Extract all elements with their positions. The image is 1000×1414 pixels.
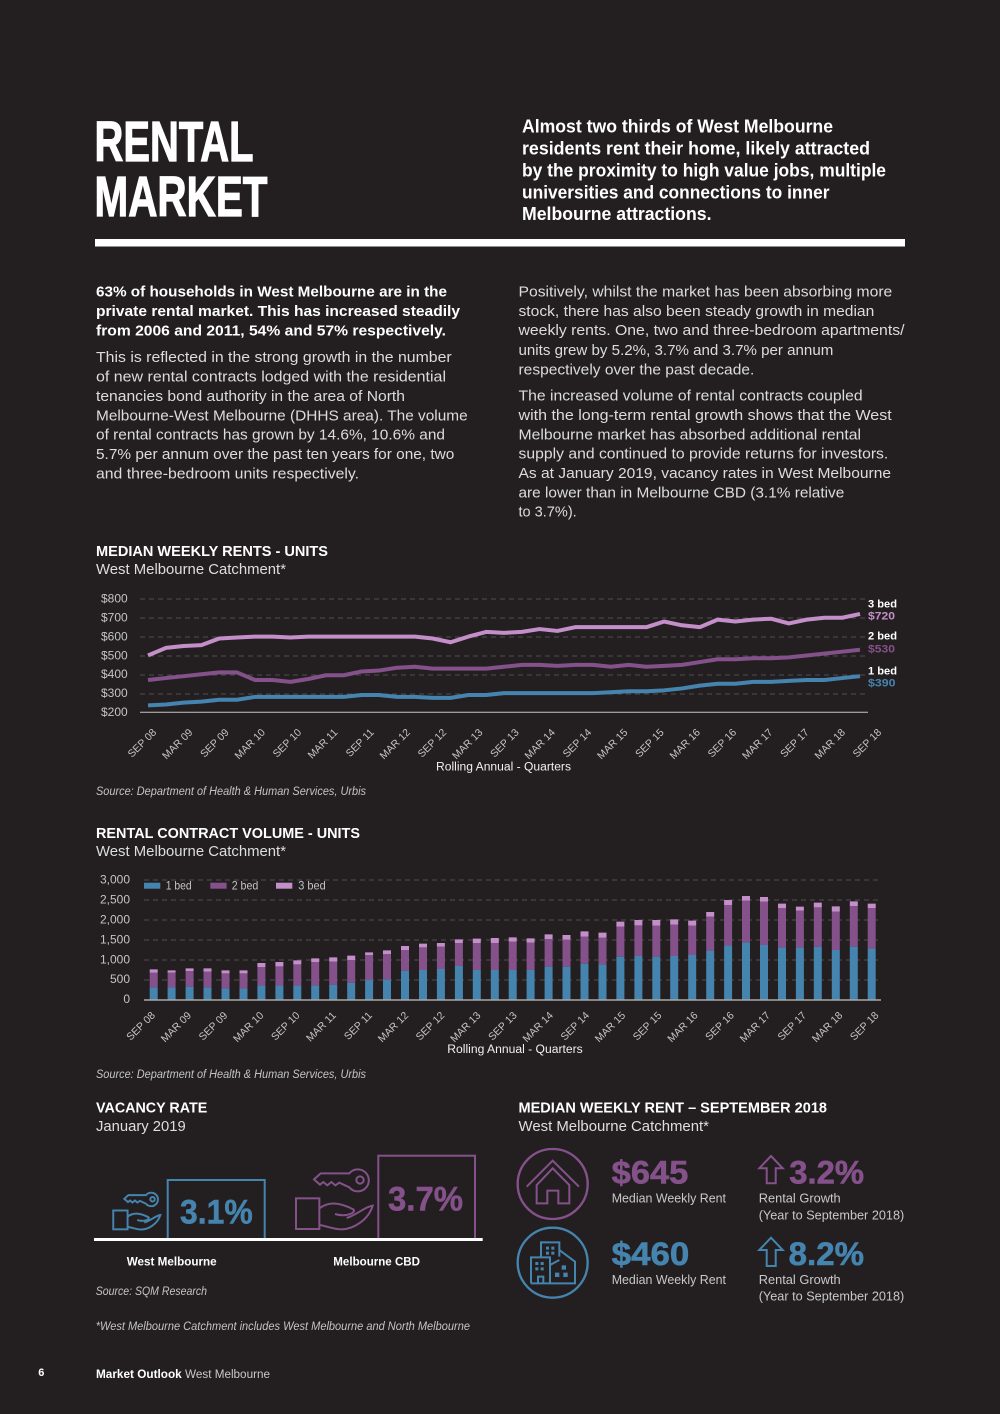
left column: body paragraph: tenancies bond authority in the area of North: [96, 388, 405, 405]
heading: median weekly rents: [96, 544, 328, 578]
right column: body paragraphs: are lower than in Melbourne CBD (3.1% relative: [518, 484, 844, 501]
stat: apartment rent $645: [612, 1154, 726, 1206]
heading: rental contract volume: RENTAL CONTRACT VOLUME - UNITS: [96, 826, 360, 842]
line chart: median weekly rents: SEP 18: [851, 727, 884, 760]
bar chart: rental contract volume: 1 bed: [166, 878, 192, 892]
line chart: median weekly rents: MAR 18: [813, 727, 848, 762]
stat: unit rent $460: $460: [612, 1236, 689, 1272]
line chart: median weekly rents: SEP 14: [561, 727, 594, 760]
source: contract chart: Source: Department of Health & Human Services, Urbis: [96, 1069, 366, 1081]
heading: vacancy rate: VACANCY RATE: [96, 1101, 208, 1117]
box: West Melbourne 3.1%: 3.1%: [180, 1193, 253, 1231]
right column: body paragraphs: The increased volume of rental contracts coupled: [518, 388, 863, 405]
footer: Market Outlook: [96, 1369, 182, 1381]
right column: body paragraphs: respectively over the past decade.: [518, 361, 754, 378]
bar chart: rental contract volume: SEP 14: [558, 1010, 592, 1043]
bar chart: rental contract volume: SEP 17: [775, 1010, 809, 1043]
stat: growth 3.2%: (Year to September 2018): [759, 1207, 904, 1222]
left column: body paragraph: of new rental contracts lodged with the residential: [96, 368, 446, 386]
bar chart: rental contract volume: 0: [123, 992, 130, 1006]
stat: apartment rent $645: Median Weekly Rent: [612, 1191, 726, 1206]
left column: lead paragraph: from 2006 and 2011, 54% and 57% respectively.: [96, 322, 446, 340]
title: RENTAL: [94, 110, 254, 174]
bar chart: rental contract volume: SEP 10: [269, 1010, 303, 1043]
heading: median weekly rent september 2018: West Melbourne Catchment*: [518, 1119, 709, 1135]
line chart: median weekly rents: $200: [101, 705, 128, 719]
line chart: median weekly rents: SEP 15: [633, 727, 667, 760]
footer: 6: [38, 1367, 44, 1379]
heading: median weekly rent september 2018: [518, 1101, 827, 1135]
right column: body paragraphs: As at January 2019, vacancy rates in West Melbourne: [518, 465, 891, 482]
line chart: median weekly rents: MAR 12: [378, 727, 413, 762]
heading: median weekly rents: West Melbourne Catchment*: [96, 562, 286, 578]
box: West Melbourne 3.1%: [168, 1180, 265, 1240]
line chart: median weekly rents: $390: [868, 678, 896, 690]
line chart: median weekly rents: MAR 09: [160, 727, 195, 762]
box: Melbourne CBD 3.7%: [378, 1156, 475, 1240]
left column: body paragraph: and three-bedroom units respectively.: [96, 465, 359, 482]
line chart: median weekly rents: $600: [101, 630, 128, 644]
icon: blue hand and key: [113, 1193, 160, 1230]
bar chart: rental contract volume: SEP 18: [848, 1010, 882, 1043]
line chart: median weekly rents: MAR 17: [740, 727, 775, 762]
line chart: median weekly rents: SEP 16: [706, 727, 739, 760]
heading: rental contract volume: [96, 826, 360, 860]
stat: growth 3.2%: Rental Growth: [759, 1191, 841, 1206]
bar chart: rental contract volume: 500: [110, 972, 130, 986]
right column: body paragraphs: Positively, whilst the market has been absorbing more: [518, 284, 892, 300]
footnote: *West Melbourne Catchment includes West Melbourne and North Melbourne: [96, 1321, 470, 1333]
heading: median weekly rent september 2018: MEDIAN WEEKLY RENT – SEPTEMBER 2018: [518, 1101, 827, 1117]
left column: body paragraph: of rental contracts has grown by 14.6%, 10.6% and: [96, 427, 445, 444]
line chart: median weekly rents: MAR 13: [450, 727, 485, 762]
line chart: median weekly rents: 1 bed: [868, 665, 897, 677]
bar chart: rental contract volume: SEP 15: [631, 1010, 664, 1043]
bar chart: rental contract volume: SEP 13: [486, 1010, 520, 1043]
left column: lead paragraph: [96, 284, 461, 340]
right column: body paragraphs: supply and continued to provide returns for investors.: [518, 446, 888, 463]
line chart: median weekly rents: $800: [101, 592, 128, 606]
bar chart: rental contract volume: MAR 18: [810, 1010, 845, 1045]
bar chart: rental contract volume: MAR 15: [593, 1010, 628, 1045]
line chart: median weekly rents: 2 bed: [868, 630, 897, 642]
stat: growth 3.2%: [759, 1154, 904, 1222]
bar chart: rental contract volume: MAR 16: [665, 1010, 701, 1045]
line chart: median weekly rents: MAR 16: [668, 727, 703, 762]
right column: body paragraphs: [517, 284, 905, 521]
bar chart: rental contract volume: MAR 13: [448, 1010, 484, 1045]
left column: lead paragraph: 63% of households in West Melbourne are in the: [96, 284, 447, 300]
line chart: median weekly rents: SEP 13: [488, 727, 522, 760]
bar chart: rental contract volume: MAR 12: [376, 1010, 411, 1045]
left column: lead paragraph: private rental market. This has increased steadily: [96, 303, 461, 320]
bar chart: rental contract volume: MAR 17: [738, 1010, 773, 1045]
bar chart: rental contract volume: MAR 11: [304, 1010, 339, 1044]
vacancy rate graphic: Melbourne CBD: [333, 1254, 420, 1268]
line chart: median weekly rents: $530: [868, 643, 895, 655]
bar chart: rental contract volume: 1,000: [100, 952, 130, 966]
line chart: median weekly rents: $300: [101, 686, 128, 700]
line chart: median weekly rents: $700: [101, 611, 128, 625]
intro text: by the proximity to high value jobs, multiple: [522, 160, 886, 180]
stat: growth 8.2%: (Year to September 2018): [759, 1289, 904, 1304]
line chart: median weekly rents: $400: [101, 667, 128, 681]
title: [94, 110, 268, 229]
line chart: median weekly rents: SEP 11: [344, 727, 377, 760]
vacancy rate graphic: [94, 1156, 483, 1268]
line chart: median weekly rents: SEP 17: [778, 727, 812, 760]
stat: growth 8.2%: 8.2%: [789, 1236, 864, 1272]
icon: purple hand and key: [296, 1169, 373, 1229]
bar chart: rental contract volume: SEP 09: [197, 1010, 230, 1043]
bar chart: rental contract volume: 1,500: [100, 932, 130, 946]
line chart: median weekly rents: SEP 09: [198, 727, 232, 760]
right column: body paragraphs: stock, there has also been steady growth in median: [518, 303, 874, 320]
intro text: Almost two thirds of West Melbourne: [522, 116, 833, 136]
bar chart: rental contract volume: [100, 872, 882, 1056]
bar chart: rental contract volume: SEP 12: [414, 1010, 447, 1043]
intro text: universities and connections to inner: [522, 182, 830, 202]
intro text: Melbourne attractions.: [522, 204, 712, 224]
right column: body paragraphs: units grew by 5.2%, 3.7% and 3.7% per annum: [518, 342, 833, 359]
line chart: median weekly rents: [101, 592, 897, 774]
line chart: median weekly rents: SEP 08: [126, 727, 159, 760]
bar chart: rental contract volume: SEP 08: [124, 1010, 158, 1043]
icon: house in circle: [518, 1149, 588, 1219]
right column: body paragraphs: weekly rents. One, two and three-bedroom apartments/: [517, 322, 905, 339]
left column: body paragraph: Melbourne-West Melbourne (DHHS area). The volume: [96, 407, 468, 424]
heading: vacancy rate: January 2019: [96, 1119, 186, 1135]
footer: West Melbourne: [185, 1369, 270, 1381]
stat: growth 8.2%: [759, 1236, 904, 1304]
intro text: residents rent their home, likely attracted: [522, 138, 870, 158]
bar chart: rental contract volume: MAR 14: [521, 1010, 556, 1045]
heading: median weekly rents: MEDIAN WEEKLY RENTS - UNITS: [96, 544, 328, 560]
left column: body paragraph: This is reflected in the strong growth in the number: [96, 349, 452, 366]
icon: apartment buildings in circle: [518, 1228, 588, 1298]
line chart: median weekly rents: MAR 15: [595, 727, 630, 762]
bar chart: rental contract volume: 3 bed: [298, 878, 326, 892]
line chart: median weekly rents: SEP 10: [271, 727, 304, 760]
bar chart: rental contract volume: MAR 09: [159, 1010, 194, 1045]
bar chart: rental contract volume: SEP 11: [342, 1010, 375, 1043]
left column: body paragraph: [96, 349, 468, 482]
stat: growth 8.2%: Rental Growth: [759, 1272, 841, 1287]
source: rents chart: Source: Department of Health & Human Services, Urbis: [96, 786, 366, 798]
heading: rental contract volume: West Melbourne Catchment*: [96, 844, 286, 860]
vacancy rate graphic: West Melbourne: [127, 1254, 217, 1268]
bar chart: rental contract volume: Rolling Annual - Quarters: [447, 1044, 583, 1056]
bar chart: rental contract volume: MAR 10: [231, 1010, 266, 1045]
footer: [38, 1367, 270, 1381]
line chart: median weekly rents: MAR 10: [233, 727, 268, 762]
bar chart: rental contract volume: SEP 16: [703, 1010, 737, 1043]
line chart: median weekly rents: Rolling Annual - Quarters: [436, 762, 571, 774]
stat: apartment rent $645: $645: [612, 1154, 688, 1190]
right column: body paragraphs: Melbourne market has absorbed additional rental: [518, 426, 861, 443]
stat: growth 3.2%: 3.2%: [789, 1154, 864, 1190]
left column: body paragraph: 5.7% per annum over the past ten years for one, two: [96, 446, 454, 463]
bar chart: rental contract volume: 2,000: [100, 912, 130, 926]
stat: unit rent $460: [612, 1236, 726, 1287]
intro text: [522, 116, 886, 224]
title: MARKET: [94, 165, 268, 229]
line chart: median weekly rents: MAR 14: [523, 727, 558, 762]
stat: unit rent $460: Median Weekly Rent: [612, 1272, 726, 1287]
line chart: median weekly rents: SEP 12: [416, 727, 449, 760]
heading: vacancy rate: [96, 1101, 208, 1135]
header rule: [95, 239, 905, 246]
line chart: median weekly rents: $500: [101, 648, 128, 662]
line chart: median weekly rents: $720: [868, 610, 895, 622]
right column: body paragraphs: to 3.7%).: [518, 504, 577, 521]
right column: body paragraphs: with the long-term rental growth shows that the West: [517, 407, 893, 424]
box: Melbourne CBD 3.7%: 3.7%: [388, 1181, 463, 1219]
bar chart: rental contract volume: 2,500: [100, 892, 130, 906]
bar chart: rental contract volume: 3,000: [100, 872, 130, 886]
line chart: median weekly rents: MAR 11: [306, 727, 340, 761]
bar chart: rental contract volume: 2 bed: [232, 878, 258, 892]
line chart: median weekly rents: 3 bed: [868, 598, 897, 610]
source: vacancy: Source: SQM Research: [96, 1286, 207, 1298]
